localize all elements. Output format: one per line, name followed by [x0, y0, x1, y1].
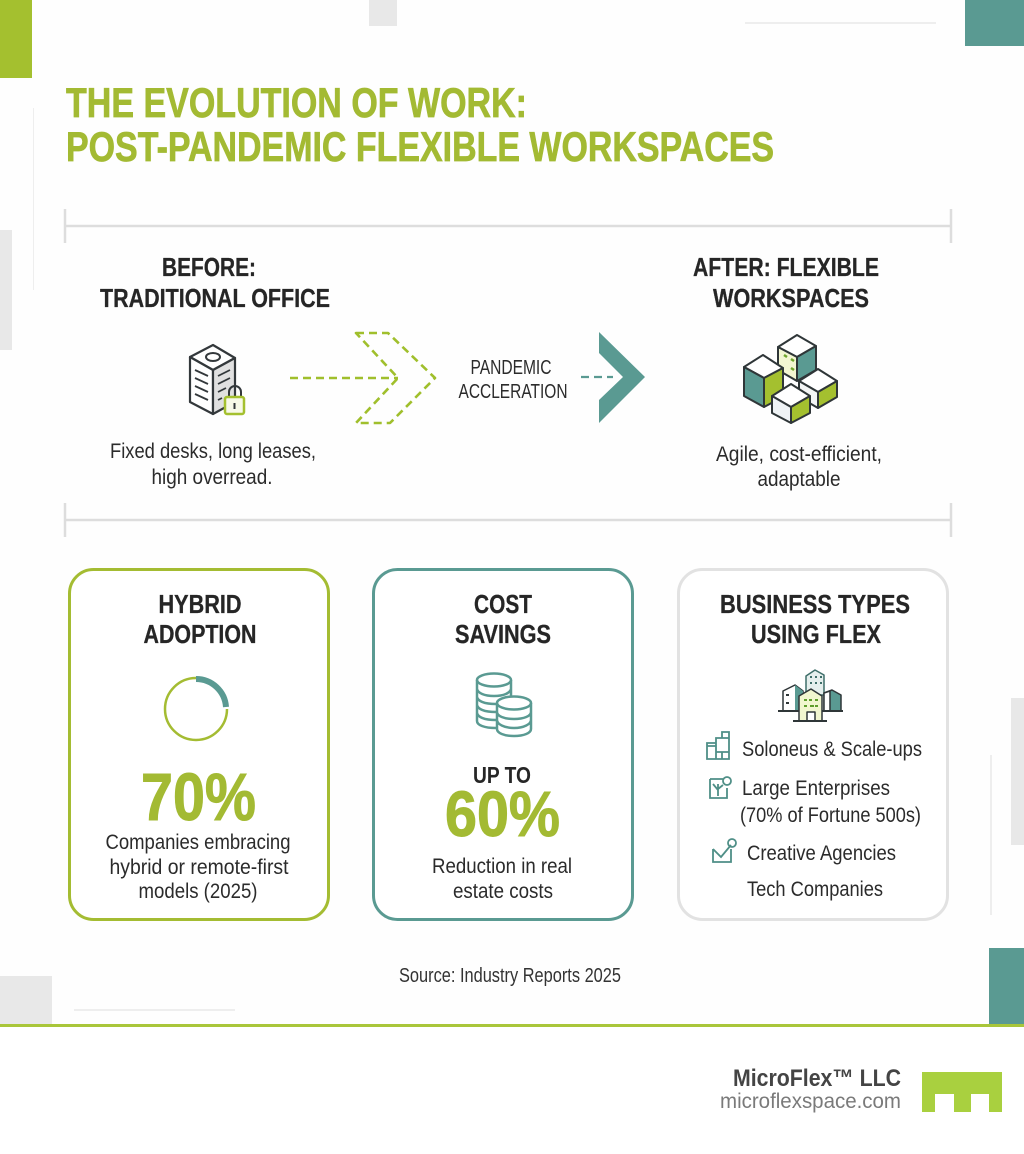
- heading: hybrid adoption: ADOPTION: [144, 619, 256, 649]
- heading: business types: USING FLEX: [751, 619, 882, 649]
- card frame: [374, 570, 632, 920]
- title: [66, 79, 774, 170]
- text: website: microflexspace.com: [720, 1090, 901, 1113]
- arrow: dashed green chevron: [290, 333, 435, 423]
- heading: cost savings: COST: [474, 589, 532, 619]
- text: cost description: Reduction in real: [432, 855, 572, 878]
- icon: coin stacks: [477, 674, 531, 736]
- text: source: Source: Industry Reports 2025: [399, 965, 621, 987]
- text: company name: MicroFlex™ LLC: [733, 1065, 901, 1092]
- card frame: [678, 570, 948, 920]
- heading: business types: BUSINESS TYPES: [720, 589, 910, 619]
- text: cost description: estate costs: [453, 880, 553, 903]
- list: business types: Tech Companies: [747, 878, 883, 901]
- text: pandemic acceleration: PANDEMIC: [470, 357, 552, 379]
- title: POST-PANDEMIC FLEXIBLE WORKSPACES: [66, 123, 774, 170]
- text: hybrid description: models (2025): [138, 880, 258, 903]
- text: after description: adaptable: [758, 468, 840, 491]
- number: 70 percent: 70%: [141, 760, 256, 835]
- card frame: [70, 570, 328, 920]
- icon: modular cubes: [744, 335, 837, 423]
- heading: before: TRADITIONAL OFFICE: [100, 283, 330, 313]
- text: up to: UP TO: [473, 762, 531, 788]
- footer brand: [720, 1065, 1002, 1113]
- number: 60 percent: 60%: [445, 778, 560, 850]
- arrow: teal chevron: [581, 332, 645, 423]
- text: after description: Agile, cost-efficient,: [716, 443, 882, 466]
- text: cost description: [432, 855, 572, 903]
- list: business types: [707, 732, 922, 901]
- bottom bracket divider: [65, 503, 951, 537]
- list: business types: Large Enterprises: [742, 777, 890, 800]
- icon: city buildings: [778, 670, 843, 721]
- heading: business types: [720, 589, 910, 649]
- heading: before: BEFORE:: [162, 252, 256, 282]
- icon: enterprise tree: [710, 777, 731, 798]
- icon: creative check mark: [713, 839, 736, 862]
- heading: after: [693, 252, 879, 313]
- text: hybrid description: hybrid or remote-first: [110, 856, 289, 879]
- heading: after: WORKSPACES: [713, 283, 869, 313]
- heading: hybrid adoption: HYBRID: [158, 589, 242, 619]
- panel: business types: [678, 570, 948, 920]
- heading: hybrid adoption: [144, 589, 256, 649]
- text: after description: [716, 443, 882, 491]
- panel: before traditional office: [100, 252, 330, 489]
- text: pandemic acceleration: [458, 357, 568, 403]
- icon: office building with lock: [190, 345, 244, 414]
- text: before description: Fixed desks, long leases,: [110, 440, 316, 463]
- list: business types: Soloneus & Scale-ups: [742, 738, 922, 761]
- list: business types: (70% of Fortune 500s): [740, 804, 921, 827]
- heading: cost savings: [455, 589, 551, 649]
- heading: cost savings: SAVINGS: [455, 619, 551, 649]
- icon: soloneus blocks: [707, 732, 729, 759]
- text: before description: high overread.: [152, 466, 272, 489]
- panel: hybrid adoption: [70, 570, 328, 920]
- icon: logo: [922, 1072, 1002, 1112]
- text: before description: [110, 440, 316, 489]
- chart: donut 70 percent: [165, 678, 227, 740]
- list: business types: Creative Agencies: [747, 842, 896, 865]
- top bracket divider: [65, 209, 951, 243]
- heading: before: [100, 252, 330, 313]
- title: THE EVOLUTION OF WORK:: [66, 79, 527, 126]
- heading: after: AFTER: FLEXIBLE: [693, 252, 879, 282]
- panel: cost savings: [374, 570, 632, 920]
- text: hybrid description: Companies embracing: [106, 831, 290, 854]
- panel: after flexible workspaces: [693, 252, 882, 491]
- text: hybrid description: [106, 831, 290, 903]
- text: pandemic acceleration: ACCLERATION: [458, 381, 568, 403]
